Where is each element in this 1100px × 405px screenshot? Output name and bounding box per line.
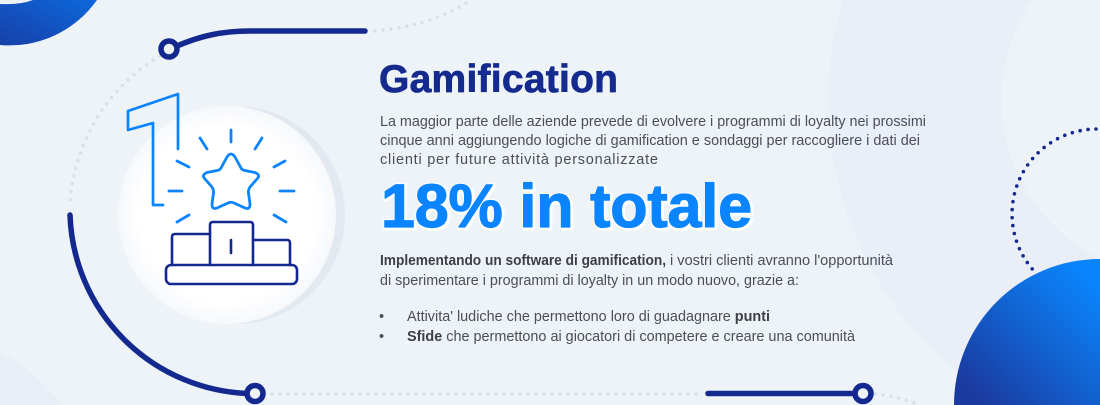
big statistic: 18% in totale (382, 173, 753, 241)
second paragraph: di sperimentare i programmi di loyalty in un modo nuovo, grazie a: (380, 273, 799, 289)
curved line: top with node (161, 31, 365, 57)
corner circle: bottom right (954, 259, 1100, 405)
dotted arc: right (1012, 129, 1096, 271)
curved line: left with node (70, 215, 263, 402)
intro paragraph (380, 114, 926, 168)
second paragraph: Implementando un software di gamification, (380, 253, 666, 269)
second paragraph (380, 253, 894, 289)
big statistic: 18% in totale (381, 172, 752, 240)
intro paragraph: La maggior parte delle aziende prevede di evolvere i programmi di loyalty nei prossimi (380, 114, 926, 130)
bullet list (379, 309, 856, 345)
bullet list: • (379, 329, 384, 345)
icon disc (118, 106, 345, 324)
intro paragraph: cinque anni aggiungendo logiche di gamification e sondaggi per raccogliere i dati dei (380, 133, 920, 149)
dotted connectors (70, 2, 915, 403)
icon: star with rays (169, 130, 294, 222)
corner circle: top left (0, 0, 97, 45)
icon: podium (166, 222, 297, 284)
bullet list: • (379, 309, 384, 325)
icon: number one (128, 94, 178, 205)
decorative ring: right (828, 0, 1100, 405)
second paragraph: i vostri clienti avranno l'opportunità (670, 253, 894, 269)
intro paragraph: clienti per future attività personalizzate (380, 152, 658, 168)
title: Gamification (379, 58, 618, 101)
bullet list: Attivita' ludiche che permettono loro di guadagnare punti (407, 309, 770, 325)
line: bottom right with node (708, 386, 871, 402)
decorative circle: bottom left (0, 352, 62, 405)
bullet list: Sfide che permettono ai giocatori di competere e creare una comunità (407, 329, 856, 345)
